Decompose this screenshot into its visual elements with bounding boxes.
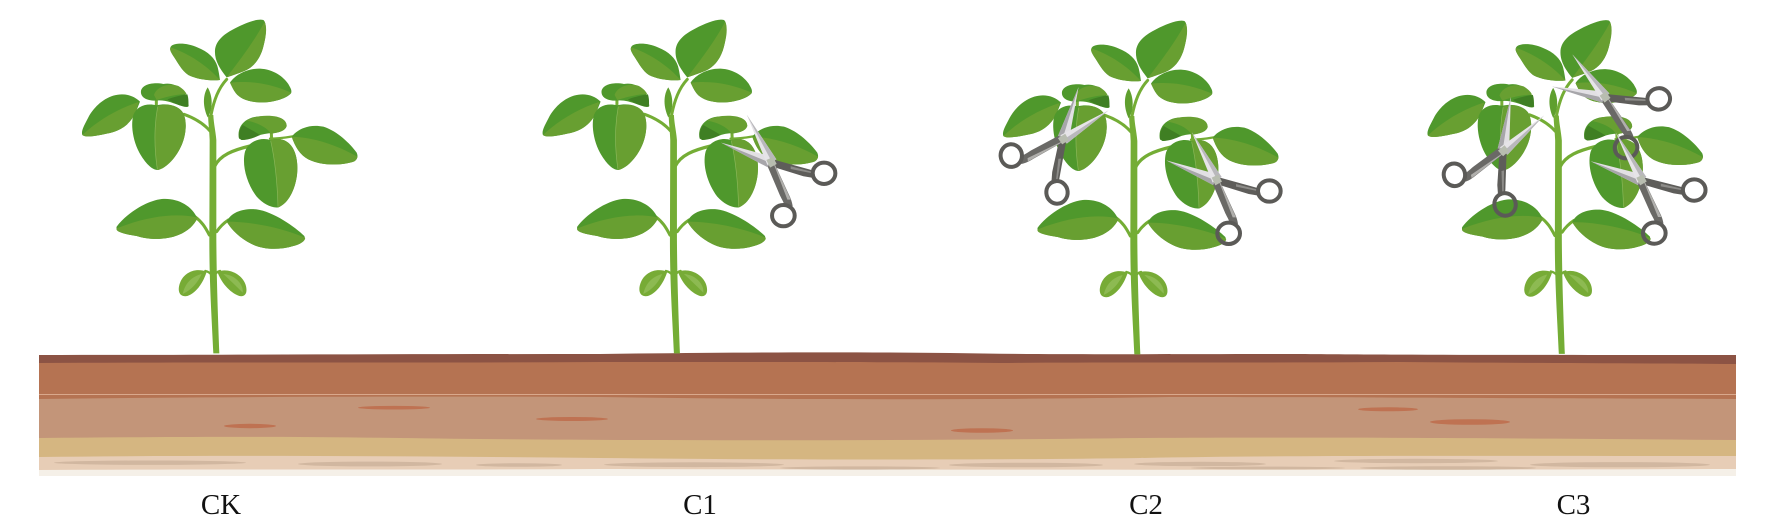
icon: scissors on C1 right leaf <box>721 115 835 226</box>
plant CK <box>82 20 357 353</box>
soil profile <box>39 352 1736 476</box>
soil layer: light clay <box>39 390 1736 440</box>
soil layer: pale subsoil fade <box>39 462 1736 476</box>
label: C3: C3 <box>1557 489 1590 521</box>
icon: scissors on C2 right leaf <box>1166 132 1281 244</box>
icon: scissors on C3 left leaf <box>1429 91 1565 228</box>
icon: scissors on C3 right leaf <box>1590 131 1706 245</box>
grey lenses in sand <box>54 459 1710 470</box>
plant C2 with two pairs of scissors <box>995 21 1281 354</box>
plant C1 with one pair of scissors <box>543 20 835 353</box>
icon: scissors on C3 top leaf <box>1547 39 1679 169</box>
label: C2: C2 <box>1129 489 1163 521</box>
soil layer: pale sand <box>39 450 1736 470</box>
plant C3 with three pairs of scissors <box>1427 20 1706 354</box>
soil layer: red-brown band <box>39 360 1736 399</box>
rust lenses in clay <box>224 406 1510 433</box>
label: CK: CK <box>201 489 241 521</box>
label: C1: C1 <box>683 489 717 521</box>
icon: scissors on C2 left leaf <box>995 85 1116 208</box>
soil layer: dark topsoil <box>39 352 1736 364</box>
soil layer: yellow sand <box>39 430 1736 460</box>
